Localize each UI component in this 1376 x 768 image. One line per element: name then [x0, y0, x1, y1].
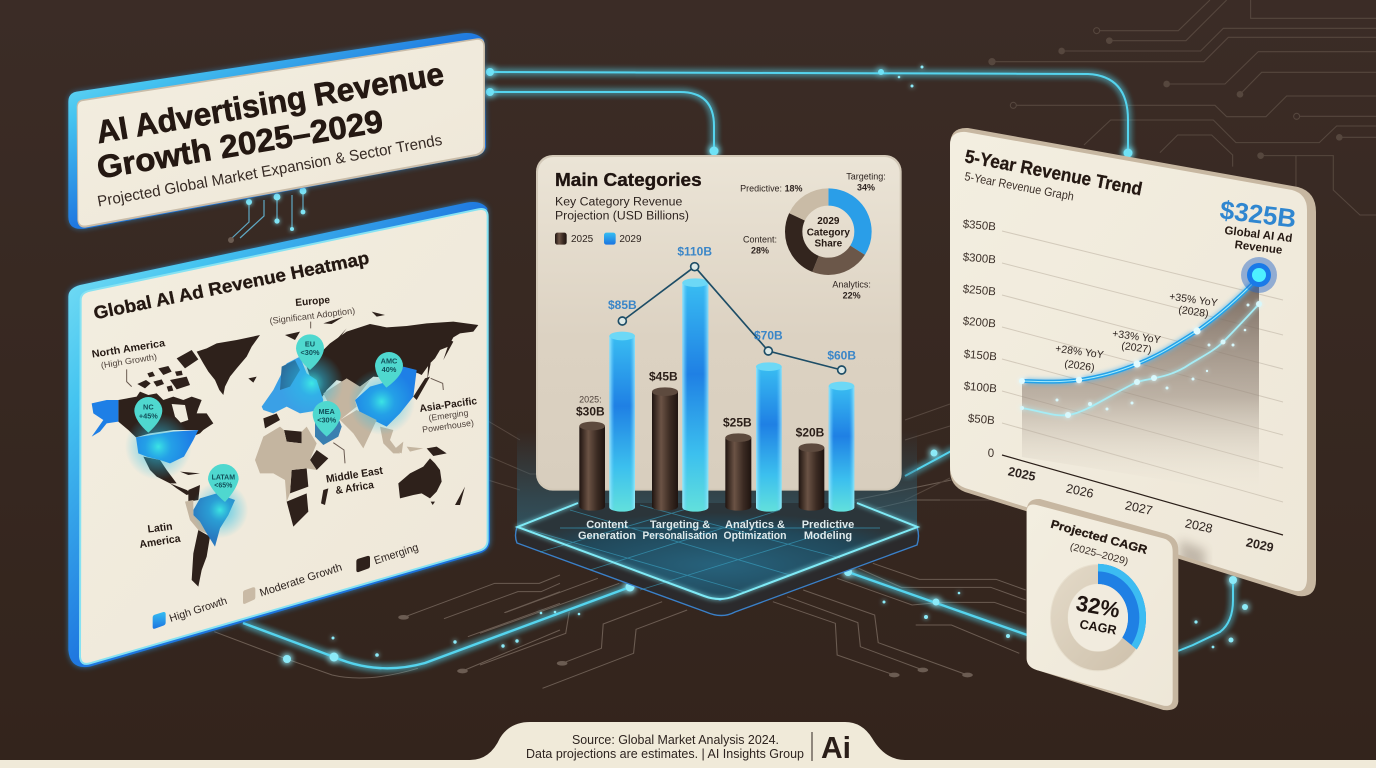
footer source text: Source: Global Market Analysis 2024. — [572, 732, 779, 747]
circuit traces right of map — [488, 404, 1030, 500]
pin: Middle East: MEA — [319, 407, 336, 416]
label: Middle East and Africa: & Africa — [335, 479, 375, 497]
label: Asia-Pacific — [419, 396, 478, 435]
bars: Analytics and Optimization — [725, 362, 782, 512]
donut labels — [740, 171, 886, 300]
bars: Content Generation — [579, 332, 635, 512]
subheading — [555, 195, 689, 223]
subheading: Key Category Revenue — [555, 195, 682, 209]
y axis labels: $50B — [967, 413, 995, 427]
connector: CAGR to trend panel — [1178, 576, 1248, 651]
y axis labels: $200B — [962, 316, 997, 330]
panel: global AI ad revenue heatmap — [68, 202, 490, 667]
subheading: Projection (USD Billions) — [555, 209, 689, 223]
category labels: Content — [586, 519, 628, 531]
donut labels: Content: — [743, 234, 777, 244]
circuit traces left of platform — [214, 575, 560, 678]
line chart grid — [1002, 231, 1283, 502]
callout: global revenue: Revenue — [1234, 239, 1283, 257]
value labels: 2025: $20B — [796, 425, 825, 439]
category labels: Generation — [578, 530, 636, 542]
callout: global revenue: Global AI Ad — [1224, 225, 1293, 245]
pin: Asia-Pacific: AMC — [381, 357, 398, 366]
legend: emerging: Emerging — [373, 542, 420, 567]
title: Growth 2025–2029 — [94, 103, 386, 186]
pin: Latin America: <65% — [214, 482, 233, 489]
donut chart: 2029 category share — [794, 197, 863, 266]
category labels: Analytics & — [725, 519, 785, 531]
YoY annotations: (2028) — [1178, 304, 1209, 320]
x axis labels: 2025 — [1007, 464, 1037, 484]
label: Asia-Pacific: Powerhouse) — [422, 417, 475, 435]
heading: revenue trend: 5-Year Revenue Trend — [963, 145, 1144, 199]
value labels: 2029 — [608, 245, 856, 362]
pin: Middle East: <30% — [317, 415, 337, 424]
footer logo: Ai — [821, 730, 851, 765]
YoY annotations — [1054, 291, 1218, 374]
label: Europe: (Significant Adoption) — [269, 306, 356, 326]
label: Europe — [269, 295, 356, 326]
label: Middle East and Africa — [325, 465, 384, 497]
legend: high growth: High Growth — [168, 595, 229, 625]
YoY annotations: +33% YoY — [1111, 328, 1161, 346]
footer source text — [526, 732, 804, 761]
footer source text: Data projections are estimates. | AI Insights Group — [526, 746, 804, 761]
heading: CAGR — [1049, 518, 1149, 568]
connector: title to revenue trend — [486, 68, 1132, 158]
legend: moderate growth: Moderate Growth — [258, 562, 344, 600]
legend: years: 2029 — [619, 234, 642, 245]
leader lines — [127, 322, 443, 463]
peak marker — [1241, 257, 1277, 293]
category labels: Personalisation — [642, 530, 718, 542]
YoY annotations: (2027) — [1121, 340, 1152, 356]
connector: chart to trend panel — [905, 449, 955, 476]
legend: years — [555, 233, 642, 245]
sparkle particles — [332, 66, 1214, 657]
circuit traces below platform — [480, 480, 1026, 688]
callout: global revenue — [1218, 195, 1298, 257]
lower trend line — [1020, 301, 1262, 418]
legend: years: 2025 — [571, 234, 594, 245]
donut labels: Targeting: — [846, 171, 886, 181]
category labels: Modeling — [804, 530, 852, 542]
circuit traces top right — [988, 0, 1376, 215]
pin: North America — [134, 397, 162, 433]
value labels: 2025: $45B — [649, 369, 678, 383]
pin: Middle East — [313, 401, 341, 437]
label: Latin America — [139, 521, 181, 551]
callout: global revenue: $325B — [1218, 195, 1298, 234]
donut: CAGR gauge: 32% — [1074, 590, 1122, 623]
panel: main categories — [536, 155, 902, 512]
pin: Latin America: LATAM — [212, 474, 235, 481]
value labels: 2029: $60B — [827, 348, 856, 362]
heading: CAGR: (2025–2029) — [1069, 542, 1129, 568]
y axis labels: 0 — [988, 448, 994, 460]
category labels: Predictive — [802, 519, 854, 531]
bars: Predictive Modeling — [799, 382, 854, 512]
value labels: 2025: $30B — [576, 405, 605, 419]
world map — [92, 312, 478, 587]
donut chart: 2029 category share: 2029 — [817, 216, 840, 227]
pin: Latin America — [208, 464, 239, 502]
line: 2029 values — [618, 263, 846, 374]
platform glow column — [517, 430, 917, 602]
value labels: 2029: $85B — [608, 298, 637, 312]
y axis labels: $250B — [962, 284, 997, 298]
panel: title card — [68, 33, 486, 229]
panel: five-year revenue trend — [950, 128, 1316, 596]
subtitle: Projected Global Market Expansion & Sector Trends — [96, 132, 444, 211]
y axis labels: $350B — [962, 219, 997, 233]
value labels: 2029: $70B — [754, 328, 783, 342]
title: AI Advertising Revenue — [93, 55, 446, 150]
YoY annotations: +28% YoY — [1054, 343, 1104, 361]
panel: projected CAGR — [1027, 499, 1178, 710]
pin: Asia-Pacific — [375, 352, 403, 388]
upper trend line — [1019, 277, 1259, 384]
pin: Europe: EU — [305, 340, 315, 349]
y axis labels: $150B — [963, 349, 998, 363]
label: Asia-Pacific: (Emerging — [428, 407, 469, 423]
heading: CAGR: Projected CAGR — [1049, 518, 1149, 557]
label: Latin America: America — [139, 533, 181, 551]
value labels: 2025: $25B — [723, 415, 752, 429]
donut labels: 22% — [843, 290, 861, 300]
x axis labels: 2027 — [1124, 498, 1154, 518]
label: North America: North America — [91, 338, 166, 361]
donut chart: 2029 category share: Category — [807, 228, 850, 239]
donut labels: 34% — [857, 183, 875, 193]
y axis labels — [962, 219, 998, 460]
connector stubs under title — [228, 188, 306, 243]
subheading: revenue graph: 5-Year Revenue Graph — [963, 169, 1075, 204]
y axis labels: $100B — [963, 381, 998, 395]
value labels: 2025: 2025: — [579, 394, 602, 404]
category labels: Optimization — [724, 530, 787, 542]
label: Latin America: Latin — [147, 521, 173, 536]
x axis labels: 2028 — [1184, 516, 1214, 536]
category labels — [578, 519, 854, 542]
x axis labels: 2029 — [1245, 535, 1275, 555]
pin: North America: +45% — [139, 411, 158, 420]
area under curve — [1022, 277, 1259, 495]
pin: Europe: <30% — [301, 348, 320, 357]
pin: Europe — [296, 334, 324, 370]
donut: CAGR gauge — [1050, 564, 1146, 671]
pin: Asia-Pacific: 40% — [382, 365, 397, 374]
label: Asia-Pacific: Asia-Pacific — [419, 396, 478, 415]
label: North America: (High Growth) — [100, 352, 158, 370]
value labels: 2029: $110B — [677, 245, 712, 259]
donut chart: 2029 category share: Share — [814, 238, 843, 249]
label: Middle East and Africa: Middle East — [325, 465, 384, 486]
donut labels: Predictive: 18% — [740, 184, 803, 194]
label: Europe: Europe — [295, 295, 331, 309]
pin: North America: NC — [143, 403, 154, 412]
connector: platform to CAGR — [844, 568, 1030, 636]
category labels: Targeting & — [650, 519, 710, 531]
label: North America — [91, 338, 166, 370]
YoY annotations: (2026) — [1064, 358, 1095, 374]
heading: main categories: Main Categories — [555, 169, 702, 190]
footer strip — [0, 722, 1376, 768]
legend: emerging — [356, 542, 420, 572]
x axis labels: 2026 — [1065, 481, 1095, 501]
isometric platform — [516, 503, 918, 616]
connector: title to main categories — [486, 88, 718, 156]
donut: CAGR gauge: CAGR — [1078, 617, 1118, 638]
x axis labels — [1007, 464, 1275, 555]
donut labels: 28% — [751, 245, 769, 255]
YoY annotations: +35% YoY — [1168, 291, 1218, 309]
donut labels: Analytics: — [832, 279, 871, 289]
CAGR card shadow — [1177, 538, 1210, 564]
y axis labels: $300B — [962, 252, 997, 266]
connector: map to platform — [243, 582, 634, 668]
hudson bay — [172, 404, 188, 423]
heading: heatmap: Global AI Ad Revenue Heatmap — [92, 248, 371, 323]
bars: Targeting and Personalisation — [652, 278, 708, 512]
legend: high growth — [153, 595, 229, 629]
value labels: 2025 — [576, 369, 825, 439]
